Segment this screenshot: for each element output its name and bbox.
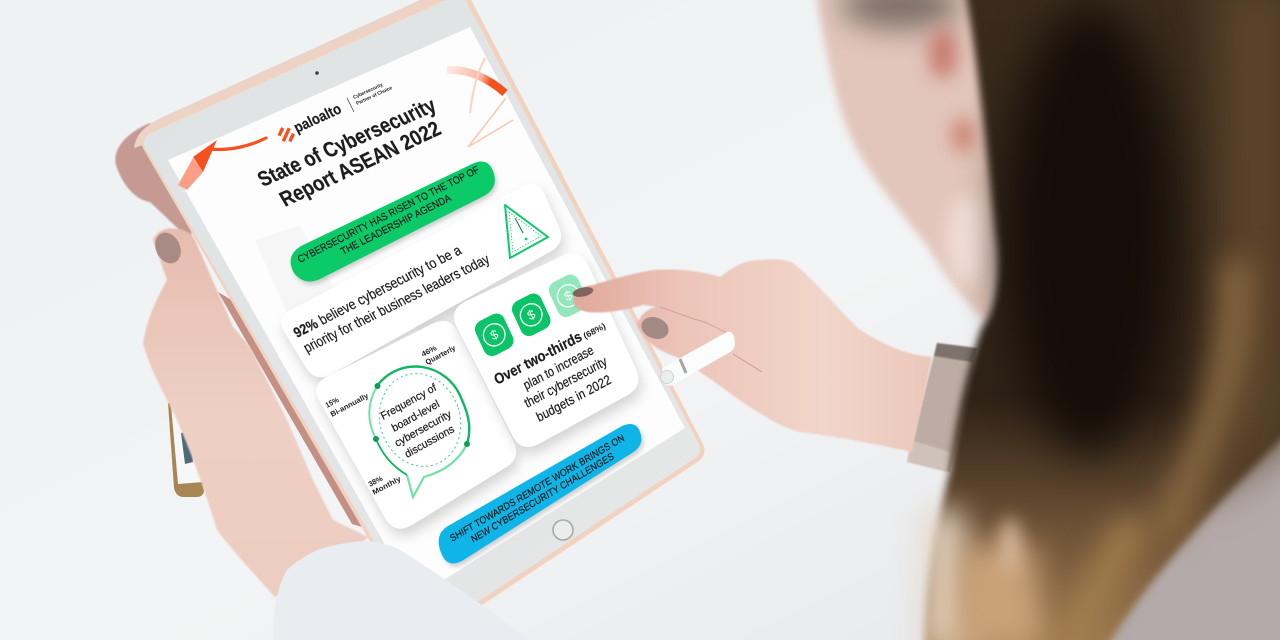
tablet screen: report page bbox=[168, 27, 685, 598]
tablet case cover bbox=[134, 0, 470, 148]
panel: 92% priority card bbox=[281, 184, 561, 377]
bubble caption: cybersecurity bbox=[393, 408, 454, 450]
blue banner: SHIFT TOWARDS REMOTE WORK BRINGS ON bbox=[449, 433, 626, 545]
budget text: Over two-thirds bbox=[492, 328, 585, 389]
bubble caption: discussions bbox=[403, 423, 457, 461]
sleeve bbox=[273, 541, 528, 640]
bubble caption bbox=[379, 381, 457, 461]
left fingers behind tablet bbox=[115, 123, 205, 240]
panel: board discussion frequency card bbox=[316, 321, 516, 529]
fingernail bbox=[150, 228, 186, 268]
hair bbox=[925, 0, 1280, 640]
reflection between hand and tablet bbox=[218, 292, 372, 530]
icon: dollar coin 3: $ bbox=[562, 287, 575, 304]
left hand bbox=[143, 228, 368, 597]
face and ear bbox=[815, 0, 1010, 328]
budget text bbox=[492, 321, 613, 425]
logo: palo alto networks: Partner of Choice bbox=[355, 85, 394, 107]
label: monthly: 38% bbox=[367, 474, 384, 489]
icon: camera bbox=[315, 71, 319, 75]
budget text: plan to increase bbox=[521, 342, 596, 393]
blue banner: NEW CYBERSECURITY CHALLENGES bbox=[470, 451, 616, 546]
label: quarterly: 46% bbox=[420, 343, 438, 359]
icon: dollar coin 2: $ bbox=[525, 306, 538, 323]
logo: palo alto networks: paloalto bbox=[291, 101, 344, 137]
icon: dollar coin 3 bbox=[546, 271, 590, 320]
watch bbox=[907, 343, 978, 472]
icon: dollar coin 2 bbox=[509, 290, 553, 339]
title: Report ASEAN 2022 bbox=[275, 116, 445, 211]
label: bi-annually: 15% bbox=[324, 395, 341, 410]
icon: warning triangle bbox=[505, 205, 548, 258]
budget text: budgets in 2022 bbox=[534, 372, 613, 425]
icon: dollar coin 1: $ bbox=[488, 326, 501, 343]
icon: dollar coin 1 bbox=[472, 310, 516, 359]
top-right orange swoosh bbox=[447, 58, 513, 147]
panel: budget card bbox=[454, 253, 638, 447]
budget text: (68%) bbox=[582, 321, 607, 341]
top-left orange swoosh bbox=[178, 138, 266, 190]
budget text: their cybersecurity bbox=[522, 354, 609, 411]
speech bubble chart bbox=[367, 363, 473, 497]
label: quarterly: Quarterly bbox=[424, 343, 458, 367]
fingernail: thumb bbox=[638, 313, 672, 343]
bubble caption: board-level bbox=[390, 398, 442, 435]
green banner: THE LEADERSHIP AGENDA bbox=[339, 193, 453, 258]
right hand bbox=[572, 259, 932, 452]
ghost background shapes bbox=[255, 225, 490, 345]
tablet body bbox=[155, 4, 691, 622]
92% text: priority for their business leaders today bbox=[301, 252, 493, 356]
icon: palo alto mark bbox=[277, 125, 296, 144]
home button bbox=[553, 520, 573, 540]
label: bi-annually: Bi-annually bbox=[329, 391, 371, 419]
92% text: 92% believe cybersecurity to be a bbox=[291, 242, 465, 341]
logo: palo alto networks bbox=[277, 82, 394, 144]
fingernail: index bbox=[572, 285, 594, 299]
label: monthly: Monthly bbox=[371, 474, 403, 497]
green banner: CYBERSECURITY HAS RISEN TO THE TOP OF bbox=[296, 165, 482, 266]
phone under the tablet bbox=[168, 400, 204, 497]
title: State of Cybersecurity bbox=[253, 93, 441, 191]
bubble caption: Frequency of bbox=[379, 381, 439, 423]
shoulder bbox=[1080, 400, 1280, 640]
logo: palo alto networks: Cybersecurity bbox=[352, 82, 384, 101]
stylus bbox=[660, 332, 735, 386]
